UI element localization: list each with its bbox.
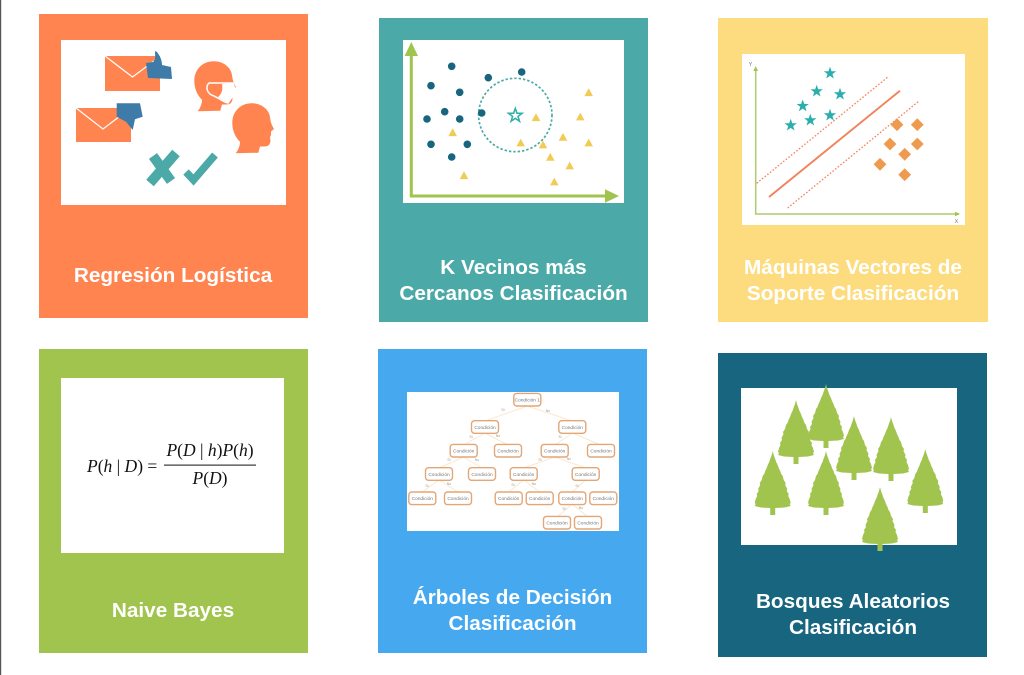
decision tree diagram: Condición	[577, 520, 599, 526]
decision tree diagram: Condición	[513, 472, 535, 478]
icon: check	[186, 155, 215, 180]
panel: K Vecinos más Cercanos	[379, 18, 648, 322]
decision tree diagram: No	[546, 409, 550, 413]
title: Árboles de Decisión	[413, 586, 612, 609]
decision tree diagram: Sí	[511, 483, 515, 487]
decision tree diagram: Condición	[474, 425, 496, 431]
decision tree diagram: No	[475, 458, 479, 462]
decision tree diagram: No	[496, 434, 500, 438]
decision tree diagram	[409, 393, 617, 529]
decision tree diagram: Condición	[529, 496, 551, 502]
panel: Máquinas Vectores de Soporte	[718, 18, 988, 322]
title: Regresión Logística	[74, 264, 273, 287]
decision tree diagram: Condición	[546, 520, 568, 526]
decision tree diagram: Sí	[558, 435, 562, 439]
decision tree diagram: Condición	[471, 472, 493, 478]
icon: cross	[150, 153, 176, 183]
decision tree diagram: Condición	[562, 496, 583, 502]
title: Bosques Aleatorios	[756, 590, 950, 613]
icon: head	[232, 103, 274, 153]
left edge line	[0, 0, 1, 675]
decision tree diagram: Condición	[498, 496, 520, 502]
title: K Vecinos más	[440, 256, 587, 279]
chart: support vector machine: Y	[749, 62, 753, 68]
chart: support vector machine	[749, 62, 960, 225]
panel: Bosques Aleatorios	[718, 353, 987, 657]
decision tree diagram: No	[579, 506, 583, 510]
panel: Árboles de Decisión	[378, 349, 647, 653]
icon: envelope with thumb up	[105, 51, 172, 91]
icon: forest of trees	[755, 384, 943, 551]
decision tree diagram: Sí	[538, 458, 542, 462]
decision tree diagram: Condición	[497, 448, 519, 454]
icon: head with mask	[194, 61, 236, 111]
decision tree diagram: No	[567, 457, 571, 461]
decision tree diagram: No	[447, 482, 451, 486]
decision tree diagram: No	[532, 482, 536, 486]
decision tree diagram: Sí	[447, 458, 451, 462]
decision tree diagram: Condición	[412, 496, 433, 502]
decision tree diagram: Condición	[562, 425, 583, 431]
title: Naive Bayes	[112, 599, 234, 622]
decision tree diagram: Condición	[575, 472, 597, 478]
decision tree diagram: Sí	[425, 484, 429, 488]
chart: support vector machine: X	[955, 219, 959, 225]
panel: Regresión Logística	[39, 14, 308, 318]
title: Clasificación	[448, 612, 577, 635]
decision tree diagram: Condición	[447, 496, 469, 502]
decision tree diagram: Sí	[469, 435, 473, 439]
panel: Naive Bayes	[39, 349, 308, 653]
formula: P(D)	[192, 468, 228, 488]
decision tree diagram: Condición	[428, 472, 450, 478]
icon: envelope with thumb down	[76, 103, 143, 142]
decision tree diagram: Sí	[575, 484, 579, 488]
title: Clasificación	[789, 616, 917, 639]
decision tree diagram: Condición	[453, 448, 475, 454]
formula: P(D | h)P(h)	[165, 440, 254, 460]
axes	[405, 42, 619, 203]
decision tree diagram: Condición	[593, 496, 614, 502]
decision tree diagram: Sí	[501, 408, 505, 412]
title: Soporte Clasificación	[747, 282, 959, 305]
decision tree diagram: Sí	[562, 507, 566, 511]
formula	[86, 440, 256, 488]
decision tree diagram: Condición	[590, 448, 612, 454]
title: Cercanos Clasificación	[399, 282, 628, 305]
decision tree diagram: Condición	[544, 448, 566, 454]
title: Máquinas Vectores de	[744, 256, 962, 279]
formula: P(h | D) =	[86, 456, 157, 476]
icon: star	[509, 108, 522, 121]
decision tree diagram: Condición 1	[515, 398, 540, 404]
scatter chart: neighbours	[423, 63, 593, 185]
